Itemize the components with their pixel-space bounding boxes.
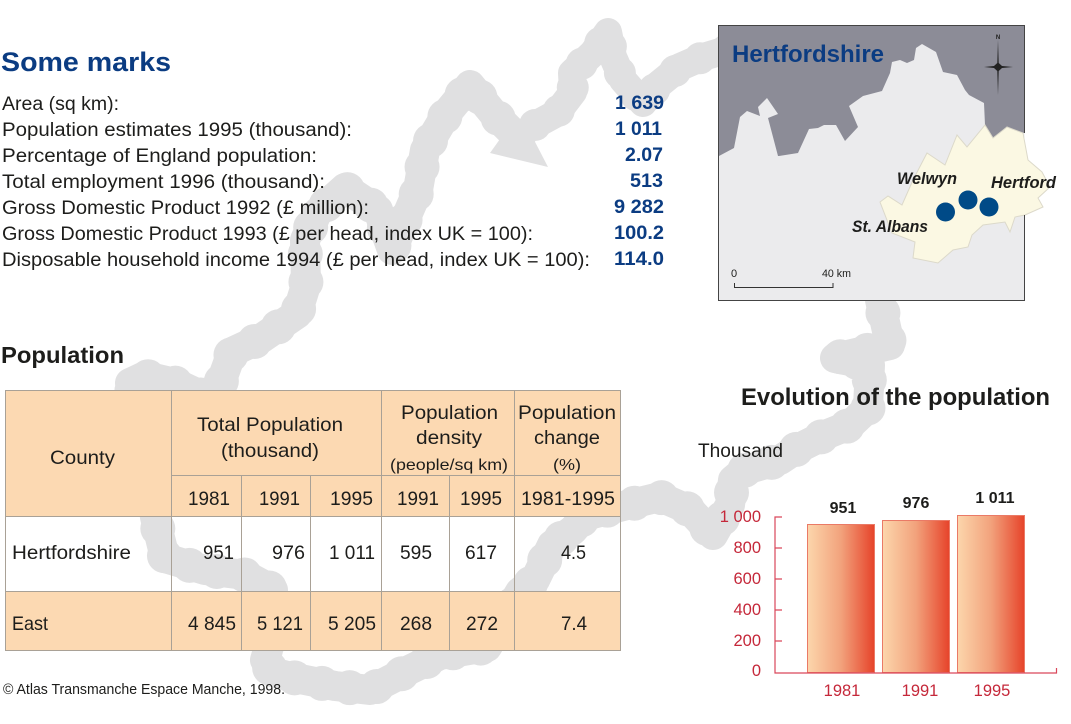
y axis labels: 600 [733, 570, 761, 588]
row: East: East [12, 613, 49, 635]
scale bar: 40 km [822, 268, 851, 280]
bar chart: population [720, 490, 1056, 700]
map frame [718, 26, 1024, 300]
column header: Population: Population [401, 402, 498, 424]
background arrow: grey winding route [130, 32, 890, 690]
scale bar [731, 268, 851, 288]
map: county of Hertfordshire [880, 125, 1050, 263]
row: Hertfordshire [12, 542, 586, 564]
bar: 1995 [958, 490, 1024, 700]
row: Hertfordshire: 617 [465, 542, 497, 564]
y axis labels: 1 000 [720, 508, 761, 526]
year row: 1995 [330, 488, 373, 510]
column header unit: thousand: (thousand) [221, 440, 319, 462]
row: East: 4 845 [188, 613, 236, 635]
panel: key figures list [2, 92, 664, 271]
row: Hertfordshire: 595 [400, 542, 432, 564]
y axis labels: 0 [752, 662, 761, 680]
row: East: 7.4 [561, 613, 587, 635]
column header: County: County [50, 447, 115, 469]
value: 9 282: 9 282 [614, 196, 664, 218]
row: East: 272 [466, 613, 498, 635]
label: income: Disposable household income 1994 (£ per head, index UK = 100): [2, 250, 590, 271]
city: St. Albans [852, 202, 955, 236]
year row: 1991 [259, 488, 300, 510]
row: Hertfordshire: 4.5 [561, 542, 586, 564]
y axis labels: 400 [733, 601, 761, 619]
bar: 1991 [882, 495, 950, 700]
label: employment: Total employment 1996 (thousand): [2, 172, 325, 193]
column header unit: people per sq km: (people/sq km) [390, 457, 508, 474]
row: Hertfordshire: 951 [203, 542, 234, 564]
label: percentage: Percentage of England population: [2, 146, 317, 167]
heading: Evolution of the population: Evolution of the population [741, 384, 1050, 411]
row: Hertfordshire: 976 [272, 542, 305, 564]
bar: 1995: 1995 [974, 682, 1010, 700]
heading: Population: Population [1, 342, 124, 368]
bar: 1981 [808, 500, 874, 700]
column header: change: change [534, 427, 600, 449]
column header: Population: Population [518, 402, 616, 424]
city: Welwyn: Welwyn [897, 169, 957, 188]
city: Hertford [980, 173, 1057, 216]
icon: compass [984, 35, 1013, 95]
value: 100.2: 100.2 [614, 222, 664, 244]
column header: Total Population: Total Population [197, 414, 343, 436]
map title: Hertfordshire [732, 41, 884, 68]
city: St. Albans: St. Albans [852, 217, 928, 236]
y axis labels [720, 508, 761, 680]
city: Hertford: Hertford [991, 173, 1057, 192]
city: Welwyn [897, 169, 978, 210]
value: 2.07: 2.07 [625, 144, 663, 166]
row: East: 268 [400, 613, 432, 635]
row: East [12, 613, 587, 635]
value: 114.0: 114.0 [614, 248, 664, 270]
row: Hertfordshire: 1 011 [329, 542, 375, 564]
heading: Some marks: Some marks [1, 47, 171, 77]
map: Hertfordshire [718, 25, 1057, 300]
year row: 1995 [460, 488, 502, 510]
year row: 1981 [188, 488, 230, 510]
label: population estimates: Population estimates 1995 (thousand): [2, 120, 352, 141]
label: GDP 1993: Gross Domestic Product 1993 (£ per head, index UK = 100): [2, 224, 533, 245]
bar: 1991: 976 [903, 495, 929, 512]
column header unit: percent: (%) [553, 457, 581, 474]
icon: compass: N [996, 35, 1000, 41]
axis unit: Thousand: Thousand [698, 440, 783, 462]
column header: density: density [416, 427, 482, 449]
credit line: © Atlas Transmanche Espace Manche, 1998. [3, 682, 285, 698]
value: 1 639: 1 639 [615, 92, 664, 114]
y axis labels: 200 [733, 632, 761, 650]
y axis labels: 800 [733, 539, 761, 557]
scale bar: 0 [731, 268, 737, 280]
value: 1 011: 1 011 [615, 118, 662, 140]
bar: 1981: 951 [830, 500, 856, 517]
row: Hertfordshire: Hertfordshire [12, 542, 131, 564]
year row: 1981-1995 [521, 488, 615, 510]
year row: 1991 [397, 488, 439, 510]
year row [188, 488, 615, 510]
bar: 1991: 1991 [902, 682, 938, 700]
bar: 1981: 1981 [824, 682, 860, 700]
map: sea area [719, 25, 1024, 156]
table: population by county [5, 390, 621, 651]
label: GDP 1992: Gross Domestic Product 1992 (£ million): [2, 198, 369, 219]
chart axes [775, 517, 1056, 673]
bar: 1995: 1 011 [975, 490, 1015, 507]
value: 513: 513 [630, 170, 663, 192]
row: East: 5 205 [328, 613, 376, 635]
label: area: Area (sq km): [2, 94, 119, 115]
row: East: 5 121 [257, 613, 303, 635]
